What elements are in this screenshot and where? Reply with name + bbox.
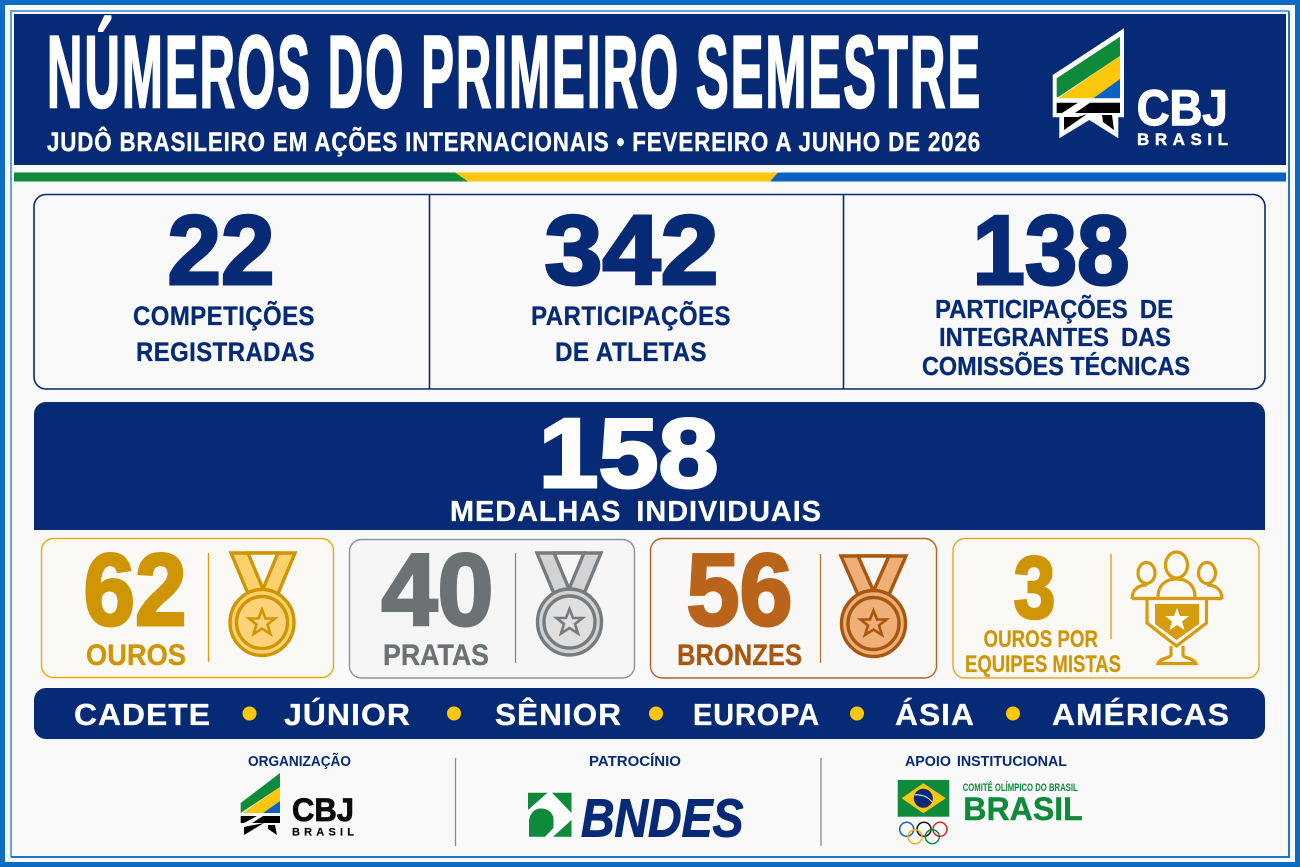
- total medals number: 158: [538, 398, 718, 508]
- logo: Olympic committee wordmark: BRASIL: [963, 791, 1083, 827]
- logo: Olympic rings: [900, 822, 947, 844]
- footer: organization: [241, 752, 354, 839]
- icon: gold medal: [230, 553, 295, 656]
- stat: competitions: REGISTRADAS: [136, 337, 315, 367]
- separator dots: [242, 706, 1020, 720]
- category labels: EUROPA: [693, 697, 820, 732]
- stat: technical staff: [922, 195, 1190, 381]
- footer: institutional support: [898, 754, 1083, 844]
- flag colour strip: [14, 172, 1286, 182]
- panel: gold medals: 62: [84, 533, 186, 647]
- category labels: ÁSIA: [895, 697, 975, 732]
- panel: gold medals: OUROS: [86, 639, 186, 672]
- footer: institutional support: APOIO INSTITUCIONAL: [905, 754, 1067, 770]
- panel: bronze medals: [650, 533, 936, 678]
- icon: bronze medal: [841, 556, 906, 656]
- logo: CBJ Brasil: BRASIL: [1137, 130, 1228, 149]
- logo: CBJ: [241, 773, 354, 839]
- category labels: AMÉRICAS: [1052, 697, 1230, 732]
- stat: technical staff: INTEGRANTES DAS: [939, 322, 1171, 352]
- panel: top statistics: [34, 194, 1265, 389]
- panel: bronze medals: 56: [686, 533, 792, 647]
- panel: bronze medals: BRONZES: [677, 639, 802, 672]
- stat: athletes: [531, 195, 731, 367]
- footer: organization: ORGANIZAÇÃO: [248, 752, 351, 770]
- footer: sponsor: PATROCÍNIO: [589, 753, 681, 770]
- stat: competitions: 22: [168, 195, 274, 305]
- stat: competitions: COMPETIÇÕES: [133, 300, 315, 331]
- stat: technical staff: COMISSÕES TÉCNICAS: [922, 351, 1190, 381]
- categories bar: [34, 688, 1265, 739]
- panel: silver medals: PRATAS: [383, 639, 489, 672]
- logo: CBJ: BRASIL: [292, 827, 354, 839]
- panel: mixed team golds: [953, 538, 1259, 678]
- stat: competitions: [133, 195, 315, 367]
- panel: mixed team golds: 3: [1014, 538, 1056, 637]
- category labels: JÚNIOR: [284, 696, 411, 732]
- icon: silver medal: [537, 553, 602, 655]
- category labels: [74, 696, 1230, 732]
- category labels: SÊNIOR: [495, 696, 622, 732]
- panel: silver medals: 40: [382, 533, 494, 647]
- logo: Brazilian flag: [898, 780, 949, 817]
- panel: mixed team golds: EQUIPES MISTAS: [965, 651, 1121, 678]
- icon: team trophy: [1132, 552, 1222, 664]
- panel: mixed team golds: OUROS POR: [984, 626, 1098, 653]
- stat: athletes: PARTICIPAÇÕES: [531, 300, 731, 331]
- stat: technical staff: 138: [972, 195, 1130, 305]
- header banner: [14, 14, 1286, 165]
- logo: CBJ Brasil: CBJ: [1137, 80, 1228, 136]
- logo: Olympic committee wordmark: COMITÊ OLÍMPICO DO BRASIL: [963, 781, 1078, 794]
- logo: BNDES: BNDES: [581, 789, 744, 849]
- panel: silver medals: [350, 533, 634, 678]
- stat: athletes: 342: [544, 195, 718, 305]
- total medals label: MEDALHAS INDIVIDUAIS: [450, 496, 822, 528]
- subtitle: JUDÔ BRASILEIRO EM AÇÕES INTERNACIONAIS • FEVEREIRO A JUNHO DE 2026: [47, 126, 981, 157]
- category labels: CADETE: [74, 697, 211, 732]
- footer: sponsor: [528, 753, 744, 849]
- stat: athletes: DE ATLETAS: [555, 337, 707, 367]
- logo: BNDES: [528, 789, 744, 849]
- logo: CBJ Brasil: [1053, 28, 1228, 149]
- title: NÚMEROS DO PRIMEIRO SEMESTRE: [47, 15, 980, 129]
- panel: gold medals: [42, 533, 334, 678]
- panel: total medals: [34, 398, 1265, 530]
- logo: CBJ: CBJ: [292, 792, 354, 828]
- stat: technical staff: PARTICIPAÇÕES DE: [935, 294, 1173, 324]
